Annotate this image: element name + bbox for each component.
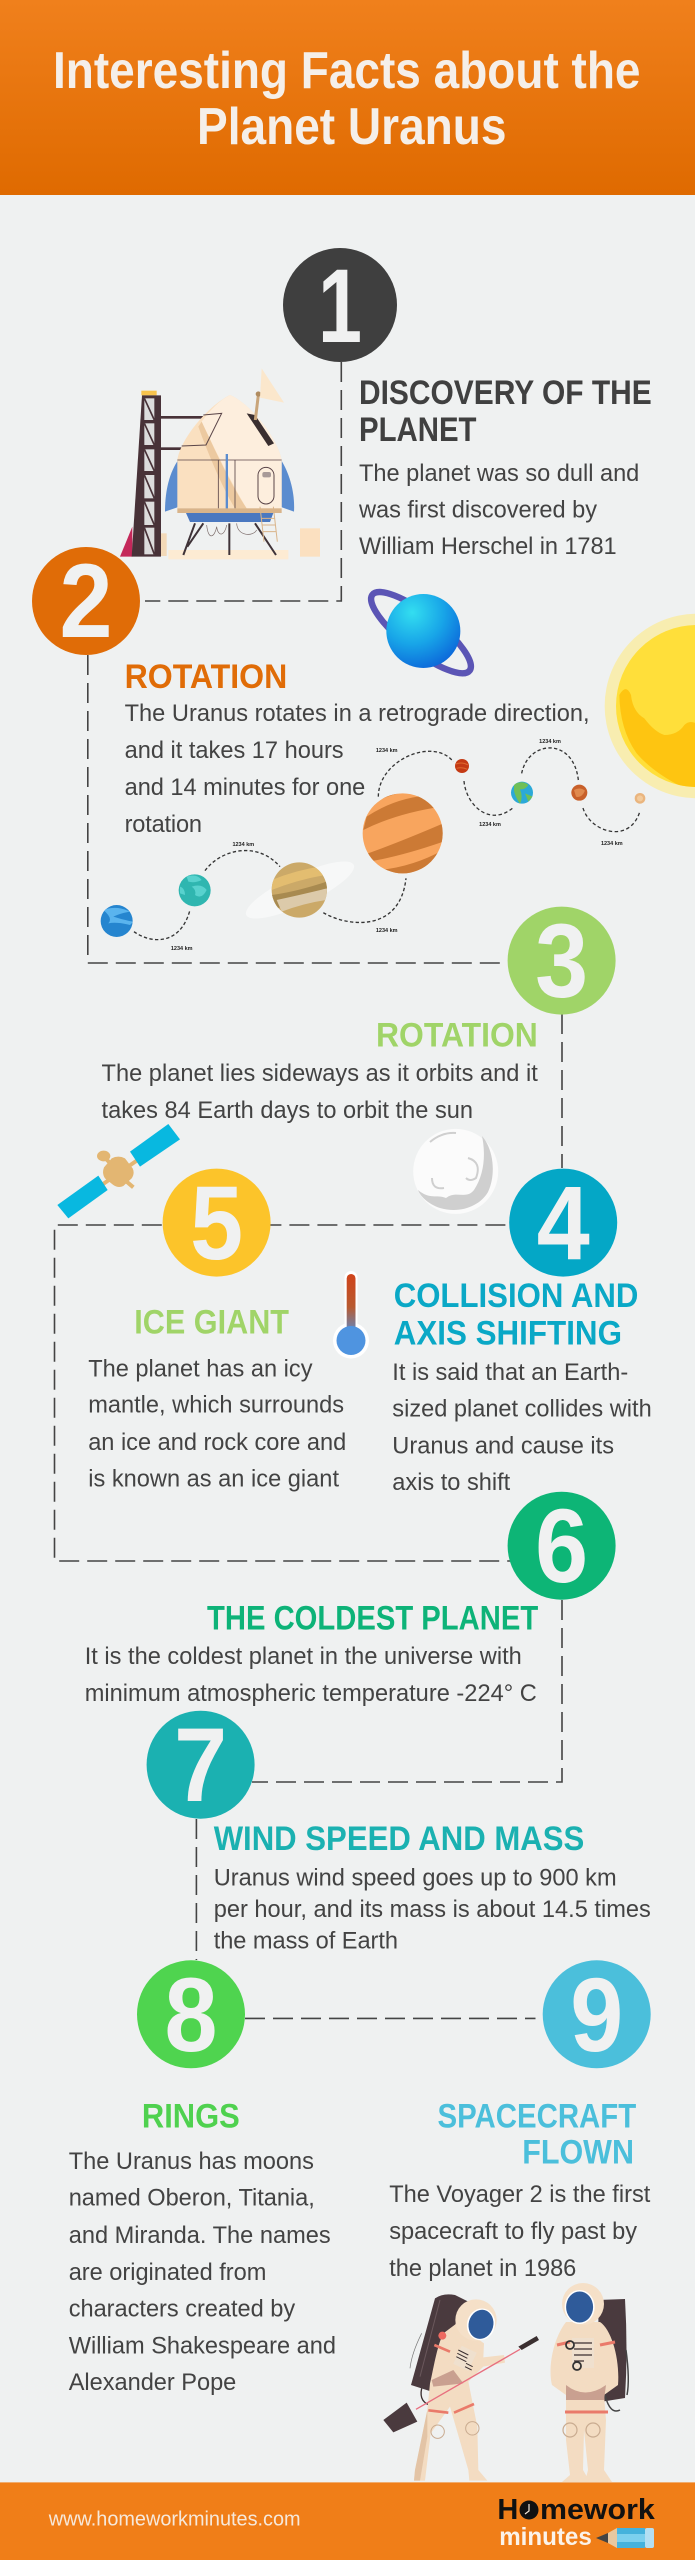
text: collision: It is said that an Earth- — [392, 1360, 628, 1386]
planets lower row — [101, 787, 443, 940]
text: wind speed — [214, 1866, 651, 1955]
logo: homework minutes: H — [497, 2494, 518, 2526]
text: rings: named Oberon, Titania, — [69, 2186, 315, 2212]
footer — [0, 2482, 695, 2560]
text: spacecraft — [389, 2182, 651, 2282]
distance labels: 1234 km — [232, 842, 254, 848]
step 6: coldest planet — [85, 1488, 616, 1707]
text: sideways orbit — [102, 1061, 538, 1124]
text: discovery: was first discovered by — [358, 498, 597, 524]
distance labels: 1234 km — [171, 946, 193, 952]
text: rings: Alexander Pope — [69, 2370, 236, 2396]
step 7: wind speed — [147, 1707, 651, 1955]
heading: rotation green: ROTATION — [376, 1016, 538, 1054]
heading: collision: AXIS SHIFTING — [394, 1314, 622, 1352]
text: wind speed: the mass of Earth — [214, 1929, 398, 1955]
illustration: astronaut standing — [551, 2283, 628, 2482]
badge 4 — [509, 1165, 617, 1282]
title: Planet Uranus — [197, 98, 506, 156]
website url: www.homeworkminutes.com — [48, 2509, 301, 2531]
step 8: rings — [69, 1957, 336, 2396]
text: collision: Uranus and cause its — [392, 1434, 614, 1460]
text: collision: sized planet collides with — [392, 1397, 652, 1423]
text: spacecraft: the planet in 1986 — [389, 2256, 576, 2282]
text: coldest — [85, 1644, 537, 1707]
illustration: rocket lander — [120, 368, 320, 559]
distance labels: 1234 km — [601, 841, 623, 847]
illustration: moon — [413, 1129, 498, 1214]
distance labels: 1234 km — [376, 928, 398, 934]
step 3: rotation — [102, 903, 616, 1124]
illustration: planets chain — [101, 739, 645, 952]
distance labels — [171, 739, 623, 952]
title — [53, 42, 640, 156]
text: rings — [69, 2149, 336, 2396]
text: rings: and Miranda. The names — [69, 2223, 331, 2249]
text: wind speed: per hour, and its mass is about 14.5 times — [214, 1897, 651, 1923]
text: discovery: The planet was so dull and — [359, 461, 639, 487]
badge 9: 9 — [570, 1957, 623, 2074]
text: spacecraft: spacecraft to fly past by — [389, 2219, 637, 2245]
icon: pencil — [596, 2528, 654, 2548]
illustration: Uranus planet with ring — [361, 580, 481, 685]
header banner — [0, 0, 695, 195]
text: discovery: William Herschel in 1781 — [359, 534, 617, 560]
text: collision: axis to shift — [392, 1470, 511, 1496]
step 2: rotation — [32, 543, 590, 838]
heading: ice giant: ICE GIANT — [134, 1304, 289, 1342]
text: sideways orbit: The planet lies sideways as it orbits and it — [102, 1061, 538, 1087]
distance labels: 1234 km — [479, 822, 501, 828]
illustration: astronaut with shovel — [383, 2294, 539, 2481]
logo: homework minutes: mework — [540, 2494, 656, 2526]
heading: spacecraft: FLOWN — [522, 2134, 634, 2172]
text: rotation: and 14 minutes for one — [125, 775, 365, 801]
text: discovery — [358, 461, 639, 560]
badge 3 — [508, 903, 616, 1020]
heading: rotation orange: ROTATION — [125, 658, 287, 696]
badge 2 — [32, 543, 140, 660]
badge 8: 8 — [164, 1957, 218, 2074]
distance labels: 1234 km — [376, 748, 398, 754]
badge 5: 5 — [190, 1165, 243, 1282]
heading: collision: COLLISION AND — [394, 1277, 638, 1315]
badge 8 — [137, 1957, 245, 2074]
heading: collision — [394, 1277, 638, 1352]
distance labels: 1234 km — [539, 739, 561, 745]
heading: spacecraft — [438, 2097, 636, 2172]
text: rotation — [125, 701, 590, 838]
logo: homework minutes: minutes — [499, 2523, 592, 2551]
heading: discovery: PLANET — [359, 411, 477, 449]
text: spacecraft: The Voyager 2 is the first — [389, 2182, 651, 2208]
text: rings: William Shakespeare and — [69, 2334, 336, 2360]
planets upper row — [378, 748, 645, 804]
text: rings: characters created by — [69, 2297, 295, 2323]
badge 5 — [163, 1165, 271, 1282]
badge 6 — [508, 1488, 616, 1605]
heading: rings: RINGS — [142, 2097, 240, 2135]
badge 4: 4 — [537, 1165, 590, 1282]
badge 2: 2 — [60, 543, 112, 660]
text: coldest: It is the coldest planet in the universe with — [85, 1644, 522, 1670]
illustration: satellite — [57, 1124, 180, 1218]
logo: homework minutes — [497, 2494, 656, 2551]
connector: dashed path through steps — [54, 362, 562, 2018]
text: collision — [392, 1360, 652, 1496]
illustration: sun — [605, 614, 695, 798]
step 9: spacecraft — [389, 1957, 651, 2282]
badge 7 — [147, 1707, 255, 1824]
badge 1 — [283, 248, 397, 365]
text: ice giant: The planet has an icy — [88, 1356, 313, 1382]
step 5: ice giant — [88, 1165, 346, 1492]
step 4: collision — [392, 1165, 652, 1496]
text: ice giant — [88, 1356, 346, 1492]
text: rotation: The Uranus rotates in a retrograde direction, — [125, 701, 590, 727]
text: rotation: rotation — [125, 812, 202, 838]
text: ice giant: is known as an ice giant — [88, 1466, 339, 1492]
badge 9 — [543, 1957, 651, 2074]
badge 1: 1 — [318, 248, 362, 365]
icon: thermometer — [333, 1271, 369, 1358]
heading: discovery: DISCOVERY OF THE — [359, 374, 652, 412]
badge 7: 7 — [174, 1707, 227, 1824]
badge 6: 6 — [535, 1488, 588, 1605]
text: coldest: minimum atmospheric temperature -224° C — [85, 1681, 537, 1707]
text: ice giant: an ice and rock core and — [88, 1430, 346, 1456]
text: rotation: and it takes 17 hours — [125, 738, 344, 764]
heading: discovery — [359, 374, 652, 449]
text: rings: are originated from — [69, 2260, 266, 2286]
text: sideways orbit: takes 84 Earth days to orbit the sun — [102, 1098, 473, 1124]
text: ice giant: mantle, which surrounds — [88, 1393, 344, 1419]
text: rings: The Uranus has moons — [69, 2149, 314, 2175]
heading: wind speed: WIND SPEED AND MASS — [214, 1820, 584, 1858]
heading: coldest: THE COLDEST PLANET — [207, 1599, 538, 1637]
text: wind speed: Uranus wind speed goes up to 900 km — [214, 1866, 617, 1892]
step 1: discovery — [283, 248, 652, 560]
badge 3: 3 — [535, 903, 588, 1020]
heading: spacecraft: SPACECRAFT — [438, 2097, 636, 2135]
